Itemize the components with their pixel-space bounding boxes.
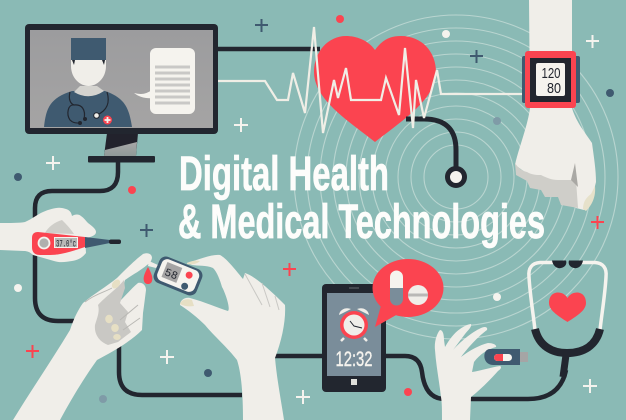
glucose meter (151, 254, 205, 298)
glucose meter: 58 (162, 267, 179, 283)
speech bubble with document (134, 48, 195, 114)
watch readout: 80 (547, 80, 561, 97)
wrist with blood pressure watch (515, 0, 596, 211)
speech bubble with pills (372, 259, 444, 327)
hand holding USB (435, 324, 501, 420)
doctor figure (44, 38, 132, 127)
smartphone: 12:32 (336, 348, 372, 371)
heart (314, 36, 436, 142)
round pill (408, 285, 428, 305)
cable from heart to sensor (406, 119, 464, 186)
monitor with doctor (25, 24, 218, 162)
smartphone (322, 284, 386, 392)
title (178, 148, 545, 249)
USB device (484, 349, 528, 365)
blood drop (144, 267, 152, 284)
heart icon (549, 293, 586, 322)
title: Digital Health (179, 148, 389, 201)
stethoscope (529, 260, 606, 377)
alarm clock (339, 308, 369, 341)
hand pricking finger (13, 253, 158, 420)
watch readout: 120 (542, 65, 560, 82)
cables connecting devices (35, 49, 566, 399)
capsule pill (390, 270, 403, 306)
hand holding glucose meter (180, 255, 285, 420)
watch readout (542, 65, 561, 97)
ECG line (218, 27, 526, 133)
thermometer: 37.0°c (56, 238, 76, 250)
hand with thermometer (0, 208, 121, 262)
